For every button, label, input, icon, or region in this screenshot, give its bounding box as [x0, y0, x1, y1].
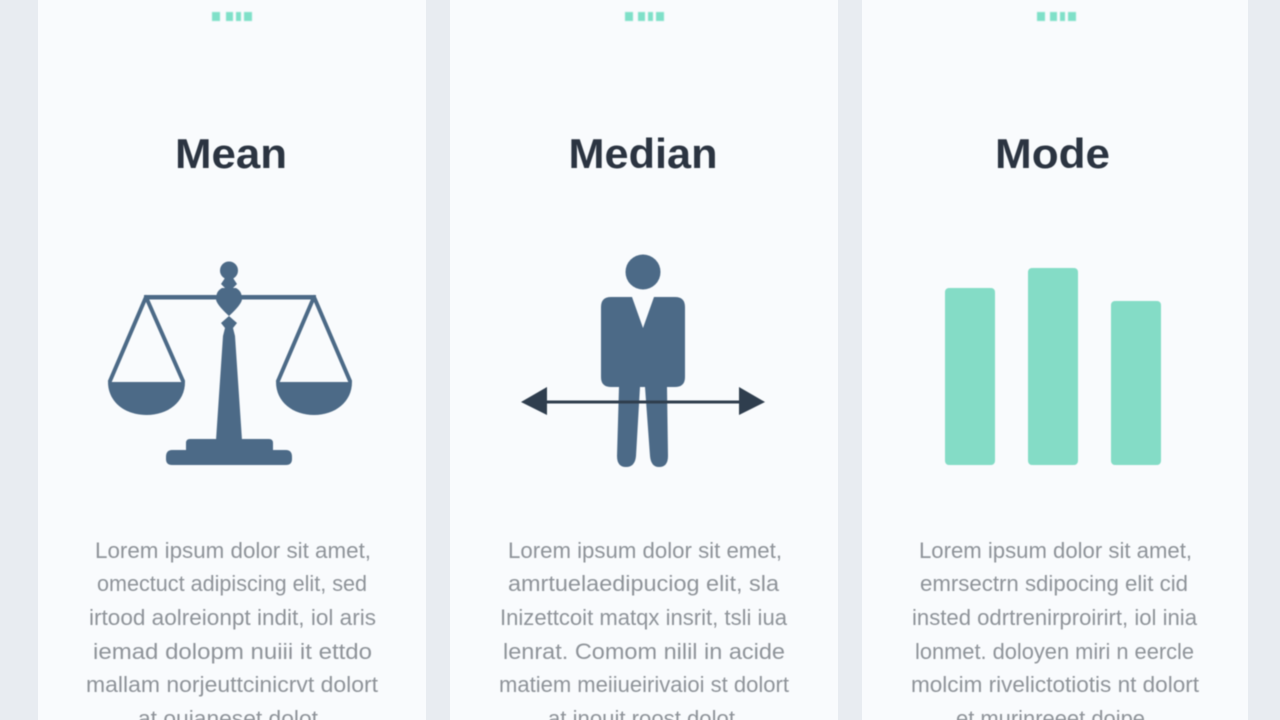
- heading: mode: Mode: [995, 130, 1110, 177]
- arrow: double-headed axis: [521, 387, 765, 415]
- text block: mean description: irtood aolreionpt indit, iol aris: [89, 605, 376, 630]
- text block: median description: [499, 538, 789, 720]
- text block: median description: amrtuelaedipuciog elit, sla: [508, 571, 780, 596]
- panel: mean: [38, 0, 426, 720]
- icon: bar chart: [945, 268, 1161, 465]
- text block: median description: lenrat. Comom nilil in acide: [503, 639, 785, 664]
- text block: mean description: mallam norjeuttcinicrvt dolort: [86, 672, 378, 697]
- text block: mean description: iemad dolopm nuiii it ettdo: [93, 639, 372, 664]
- decorative marker: mode: [1037, 12, 1076, 21]
- text block: mode description: insted odrtrenirproirirt, iol inia: [912, 605, 1198, 630]
- heading: mean: Mean: [175, 130, 287, 177]
- text block: mode description: Lorem ipsum dolor sit amet,: [919, 538, 1192, 563]
- text block: mean description: Lorem ipsum dolor sit amet,: [95, 538, 371, 563]
- text block: median description: matiem meiiueirivaioi st dolort: [499, 672, 789, 697]
- text block: mode description: molcim rivelictotiotis nt dolort: [911, 672, 1199, 697]
- text block: mean description: [86, 538, 378, 720]
- text block: mode description: [911, 538, 1199, 720]
- icon: balance scale: [108, 262, 352, 465]
- text block: mean description: omectuct adipiscing elit, sed: [97, 571, 367, 596]
- text block: median description: Inizettcoit matqx insrit, tsli iua: [500, 605, 788, 630]
- decorative marker: mean: [212, 12, 252, 21]
- heading: median: Median: [568, 130, 718, 177]
- text block: mode description: lonmet. doloyen miri n eercle: [915, 639, 1194, 664]
- text block: median description: Lorem ipsum dolor sit emet,: [508, 538, 782, 563]
- text block: mode description: emrsectrn sdipocing elit cid: [920, 571, 1188, 596]
- icon: person on a number line: [521, 254, 765, 467]
- panel: mode: [862, 0, 1248, 720]
- panel: median: [450, 0, 838, 720]
- decorative marker: median: [625, 12, 664, 21]
